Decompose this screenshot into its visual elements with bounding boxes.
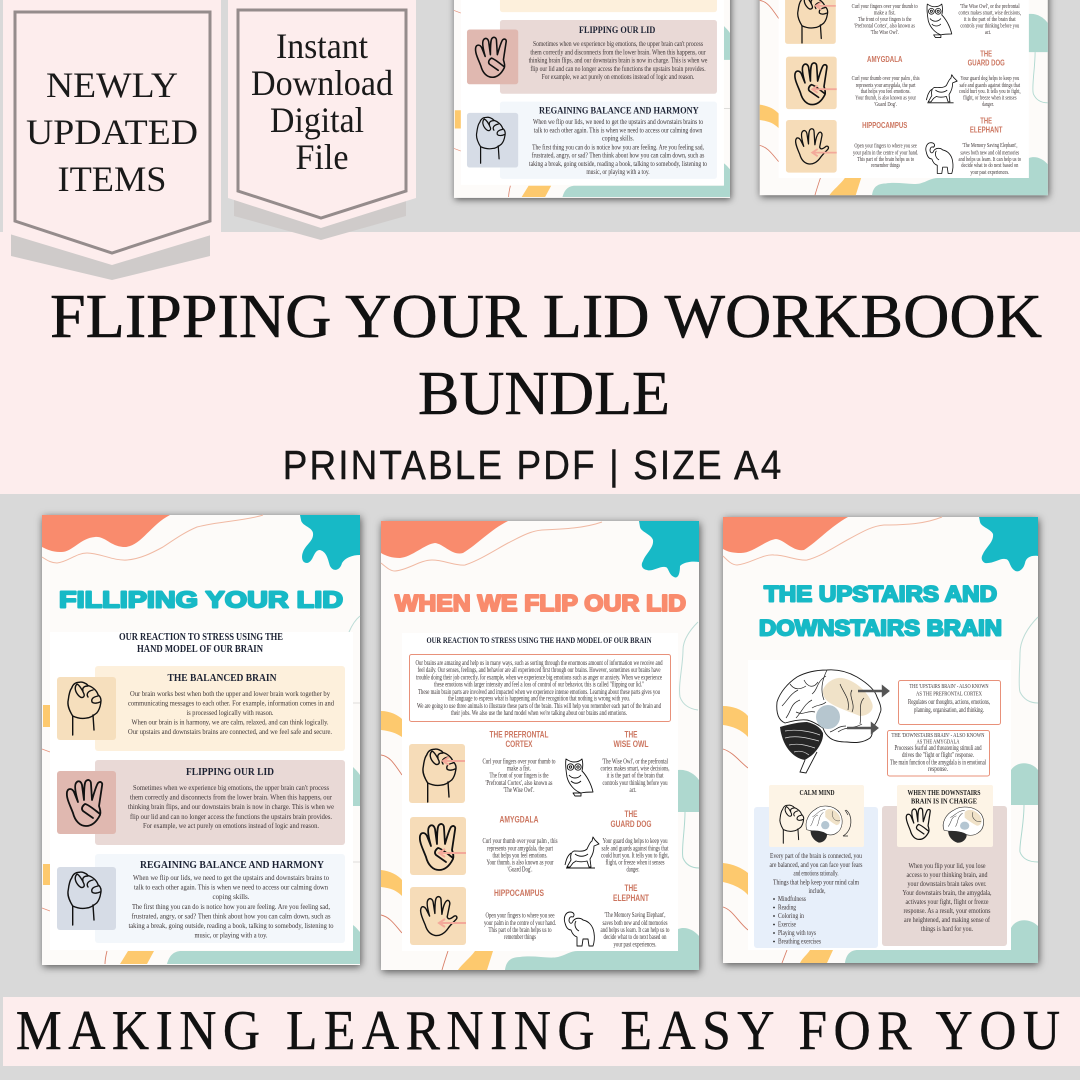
callout: downstairs brain: drives the "fight or flight" response.: [902, 752, 974, 759]
row: hippocampus and elephant: This part of the brain helps us to: [488, 927, 552, 934]
block: regaining balance and harmony: frustrated, angry, or sad? Then think about how you can calm down, such as: [132, 912, 330, 921]
row: amygdala and guard dog: THE: [624, 809, 638, 819]
card: when the downstairs brain is in charge: BRAIN IS IN CHARGE: [911, 798, 977, 806]
banner: instant download digital file: [228, 0, 416, 240]
row: hippocampus and elephant: 'The Memory Saving Elephant',: [604, 912, 666, 919]
top preview page: hand model: could hurt you. It tells you to fight,: [959, 88, 1021, 95]
banner band: pink title strip: [0, 232, 1080, 494]
banner: newly updated items: NEWLY: [46, 65, 178, 105]
block: regaining balance and harmony: [57, 854, 345, 943]
row: hippocampus and elephant: HIPPOCAMPUS: [494, 888, 544, 898]
heading: the upstairs and downstairs brain: THE UPSTAIRS AND: [764, 582, 997, 606]
top preview page: flipping our lid: REGAINING BALANCE AND HARMONY: [539, 106, 699, 116]
top preview page: hand model: THE: [980, 50, 992, 59]
title: [50, 283, 1042, 428]
panel: worksheet when we flip our lid: [381, 521, 699, 970]
block: the balanced brain: is processed logically with reason.: [186, 708, 274, 717]
callout: downstairs brain: THE 'DOWNSTAIRS BRAIN' - ALSO KNOWN: [892, 733, 985, 739]
top preview page: hand model: safe and guards against things that: [959, 82, 1020, 89]
row: amygdala and guard dog: [410, 809, 669, 875]
row: prefrontal cortex and wise owl: act.: [630, 787, 637, 794]
heading: the upstairs and downstairs brain: DOWNSTAIRS BRAIN: [759, 616, 1002, 640]
block: regaining balance and harmony: When we flip our lids, we need to get the upstairs and downstairs brains to: [133, 873, 329, 882]
subheading: OUR REACTION TO STRESS USING THE HAND MODEL OF OUR BRAIN: [426, 636, 652, 645]
top preview page: hand model: The front of your fingers is the: [858, 16, 912, 23]
card: when the downstairs brain is in charge: WHEN THE DOWNSTAIRS: [908, 790, 981, 797]
row: prefrontal cortex and wise owl: cortex makes smart, wise decisions,: [600, 766, 670, 772]
top preview page: hand model: danger.: [982, 102, 994, 108]
intro box: These main brain parts are involved and impacted when we experience intense emotions. Learning about these parts gives you: [418, 689, 660, 696]
row: hippocampus and elephant: THE: [624, 883, 638, 893]
row: amygdala and guard dog: Curl your thumb over your palm , this: [482, 838, 558, 845]
callout: upstairs brain: planning, organisation, and thinking.: [914, 707, 984, 714]
top preview page: hand model: cortex makes smart, wise decisions,: [959, 10, 1021, 16]
row: amygdala and guard dog: Your thumb, is also known as your: [486, 859, 554, 866]
row: amygdala and guard dog: flight, or freeze when it senses: [606, 859, 665, 866]
top preview page: hand model: act.: [985, 30, 992, 36]
top preview page: flipping our lid: thinking brain flips, and our downstairs brain is now in charge. This is when we: [529, 58, 707, 65]
card: when the downstairs brain is in charge: are heightened, and making sense of: [904, 915, 990, 924]
card: when the downstairs brain is in charge: Your downstairs brain, the amygdala,: [902, 888, 992, 897]
top preview page: hand model: Open your fingers to where you see: [854, 143, 917, 150]
row: hippocampus and elephant: your palm in the centre of your hand.: [484, 920, 556, 927]
top preview page: flipping our lid: coping skills.: [602, 136, 634, 143]
row: hippocampus and elephant: decide what to do next based on: [604, 934, 667, 941]
row: prefrontal cortex and wise owl: 'The Wise Owl', or the prefrontal: [602, 758, 668, 766]
row: amygdala and guard dog: AMYGDALA: [500, 815, 539, 825]
intro box: the language to express what is happening and the recognition that nothing is wrong with you.: [448, 696, 630, 702]
row: hippocampus and elephant: and helps us learn. It can help us to: [600, 927, 670, 934]
card: when the downstairs brain is in charge: things is hard for you.: [921, 924, 973, 933]
card: calm mind: include,: [808, 886, 826, 895]
top preview page: flipping our lid: them correctly and disconnects from the lower brain. When this happens, our: [530, 49, 706, 56]
top preview page: hand model: Your guard dog helps to keep you: [960, 76, 1019, 82]
card: calm mind: Things that help keep your mind calm: [773, 878, 859, 886]
intro box: these emotions with larger intensity and feel a loss of control of our behavior, this is called "flipping our lid.": [434, 682, 644, 688]
row: amygdala and guard dog: could hurt you. It tells you to fight,: [601, 852, 669, 859]
top preview page: hand model: Curl your thumb over your palm , this: [852, 76, 920, 82]
row: hippocampus and elephant: your past experiences.: [614, 942, 657, 949]
intro box: feel daily. Our senses, feelings, and behavior are all experienced first through our brains. However, sometimes our brains have: [418, 667, 660, 674]
block: the balanced brain: Our brain works best when both the upper and lower brain work together by: [130, 689, 330, 698]
block: flipping our lid: them correctly and disconnects from the lower brain. When this happens, our: [130, 793, 332, 802]
card: calm mind: Exercise: [778, 920, 796, 928]
top preview page: hand model: 'Guard Dog'.: [874, 102, 897, 108]
top preview page: hand model: remember things: [871, 163, 901, 169]
top preview page: hand model: decide what to do next based on: [961, 163, 1018, 169]
row: amygdala and guard dog: GUARD DOG: [610, 819, 652, 829]
row: amygdala and guard dog: Your guard dog helps to keep you: [602, 838, 668, 845]
intro box: [410, 654, 670, 722]
title: FLIPPING YOUR LID WORKBOOK: [50, 283, 1042, 351]
block: the balanced brain: [57, 666, 345, 751]
callout: upstairs brain: AS THE PREFRONTAL CORTEX: [916, 692, 983, 698]
subtitle: PRINTABLE PDF | SIZE A4: [283, 443, 781, 488]
row: prefrontal cortex and wise owl: Curl your fingers over your thumb to: [482, 758, 556, 766]
callout: upstairs brain: Regulates our thoughts, actions, emotions,: [908, 699, 990, 706]
banner: newly updated items: [3, 0, 221, 280]
row: hippocampus and elephant: remember things: [504, 934, 536, 941]
brain diagram: [777, 670, 881, 773]
panel: worksheet upstairs and downstairs brain: [723, 517, 1038, 963]
row: prefrontal cortex and wise owl: 'Prefrontal Cortex', also known as: [486, 780, 553, 787]
card: calm mind: Coloring in: [778, 911, 804, 920]
top preview page: hand model: THE: [980, 117, 992, 126]
arrow: to downstairs brain: [847, 724, 877, 732]
top preview page: flipping our lid: taking a break, going outside, reading a book, talking to somebody, listening to: [529, 161, 707, 168]
card: calm mind: Mindfulness: [778, 894, 806, 903]
row: hippocampus and elephant: Open your fingers to where you see: [486, 913, 554, 920]
card: calm mind: Breathing exercises: [778, 936, 821, 946]
card: when the downstairs brain is in charge: response. As a result, your emotions: [904, 906, 990, 915]
card: calm mind: Playing with toys: [778, 928, 816, 937]
top preview page: hand model: [760, 0, 1048, 195]
block: the balanced brain: When our brain is in harmony, we are calm, relaxed, and can think logically.: [132, 718, 329, 727]
top preview page: hand model: 'Prefrontal Cortex', also known as: [854, 23, 916, 30]
row: amygdala and guard dog: safe and guards against things that: [602, 845, 669, 852]
top preview page: hand model: AMYGDALA: [867, 55, 902, 64]
top preview page: flipping our lid: music, or playing with a toy.: [586, 169, 650, 176]
card: calm mind: are balanced, and you can face your fears: [770, 860, 862, 869]
block: flipping our lid: [57, 760, 345, 845]
top preview page: hand model: controls your thinking before you: [960, 23, 1019, 30]
top preview page: flipping our lid: The first thing you can do is notice how you are feeling. Are you feeling sad,: [532, 144, 704, 151]
top preview page: hand model: saves both new and old memories: [960, 150, 1020, 156]
callout: downstairs brain: [888, 730, 990, 776]
row: prefrontal cortex and wise owl: The front of your fingers is the: [490, 772, 548, 780]
arrow: to upstairs brain: [858, 687, 888, 695]
top preview page: hand model: 'The Wise Owl'.: [871, 30, 899, 36]
block: flipping our lid: thinking brain flips, and our downstairs brain is now in charge. This is when we: [128, 802, 334, 811]
row: prefrontal cortex and wise owl: THE: [624, 730, 638, 740]
card: when the downstairs brain is in charge: your downstairs brain takes over.: [908, 879, 987, 888]
row: hippocampus and elephant: saves both new and old memories: [602, 920, 668, 927]
card: calm mind: and emotions rationally.: [794, 868, 839, 878]
block: flipping our lid: Sometimes when we experience big emotions, the upper brain can't process: [133, 783, 329, 792]
block: the balanced brain: communicating messages to each other. For example, information comes in and: [128, 698, 334, 708]
block: regaining balance and harmony: coping skills.: [212, 892, 250, 901]
banner: instant download digital file: Instant: [276, 26, 368, 66]
banner: newly updated items: ITEMS: [58, 159, 166, 199]
title: BUNDLE: [418, 360, 670, 428]
block: regaining balance and harmony: music, or playing with a toy.: [194, 930, 268, 940]
block: regaining balance and harmony: talk to each other again. This is when we need to access our calming down: [134, 883, 328, 892]
banner: instant download digital file: Digital: [270, 100, 364, 140]
block: flipping our lid: For example, we act purely on emotions instead of logic and reason.: [143, 821, 319, 830]
top preview page: flipping our lid: Sometimes when we experience big emotions, the upper brain can't process: [533, 41, 703, 48]
banner: instant download digital file: Download: [251, 63, 393, 103]
callout: downstairs brain: AS THE AMYGDALA: [916, 740, 960, 746]
card: calm mind: CALM MIND: [800, 790, 835, 797]
row: amygdala and guard dog: danger.: [626, 867, 640, 874]
top preview page: hand model: and helps us learn. It can help us to: [959, 157, 1021, 163]
subheading: [119, 632, 283, 655]
footer band with tagline: MAKING LEARNING EASY FOR YOU: [16, 999, 1060, 1061]
subheading: HAND MODEL OF OUR BRAIN: [137, 644, 263, 655]
row: prefrontal cortex and wise owl: WISE OWL: [614, 739, 649, 749]
heading: the upstairs and downstairs brain: [759, 582, 1002, 640]
top preview page: flipping our lid: [454, 0, 730, 198]
callout: upstairs brain: THE 'UPSTAIRS BRAIN' - ALSO KNOWN: [910, 684, 989, 690]
top preview page: flipping our lid: flip our lid and can no longer access the functions the upstairs brain provides.: [530, 66, 706, 73]
block: regaining balance and harmony: The first thing you can do is notice how you are feeling. Are you feeling sad,: [132, 902, 330, 911]
row: hippocampus and elephant: [410, 883, 670, 949]
row: prefrontal cortex and wise owl: controls your thinking before you: [602, 780, 668, 787]
callout: downstairs brain: response.: [928, 766, 948, 773]
panel: worksheet filliping your lid: [42, 515, 360, 965]
heading: when we flip our lid: WHEN WE FLIP OUR LID: [395, 590, 686, 616]
top preview page: hand model: HIPPOCAMPUS: [862, 121, 908, 130]
top preview page: hand model: that helps you feel emotions.: [861, 88, 911, 95]
card: when the downstairs brain is in charge: [882, 785, 1007, 946]
block: the balanced brain: Our upstairs and downstairs brains are connected, and we feel safe and secure.: [128, 727, 332, 736]
top preview page: hand model: it is the part of the brain that: [964, 16, 1016, 23]
top preview page: hand model: represents your amygdala, the part: [856, 83, 916, 89]
top preview page: hand model: your palm in the centre of your hand.: [853, 149, 919, 156]
card: calm mind: Every part of the brain is connected, you: [770, 851, 862, 860]
row: prefrontal cortex and wise owl: [409, 730, 670, 803]
decor shapes: [723, 517, 1038, 963]
callout: downstairs brain: Processes fearful and threatening stimuli and: [894, 745, 982, 752]
top preview page: flipping our lid: For example, we act purely on emotions instead of logic and reason.: [542, 74, 695, 81]
block: regaining balance and harmony: REGAINING BALANCE AND HARMONY: [140, 860, 324, 871]
intro box: their jobs. We also use the hand model when we're talking about our brains and emotions.: [451, 710, 627, 717]
card: calm mind: [754, 785, 878, 948]
card: when the downstairs brain is in charge: When you flip your lid, you lose: [908, 861, 986, 870]
top preview page: hand model: GUARD DOG: [968, 59, 1005, 68]
row: prefrontal cortex and wise owl: CORTEX: [506, 739, 532, 749]
row: amygdala and guard dog: that helps you feel emotions.: [492, 852, 548, 859]
top preview page: hand model: 'The Wise Owl', or the prefrontal: [960, 3, 1020, 10]
row: prefrontal cortex and wise owl: THE PREFRONTAL: [490, 730, 549, 740]
callout: downstairs brain: The main function of the amygdala is in emotional: [890, 760, 986, 766]
row: prefrontal cortex and wise owl: make a fist.: [507, 766, 531, 772]
block: regaining balance and harmony: taking a break, going outside, reading a book, talking to somebody, listening to: [128, 921, 334, 930]
subheading: OUR REACTION TO STRESS USING THE: [119, 632, 283, 643]
row: prefrontal cortex and wise owl: it is the part of the brain that: [606, 772, 664, 780]
row: amygdala and guard dog: represents your amygdala, the part: [487, 845, 553, 852]
top preview page: hand model: your past experiences.: [970, 170, 1010, 176]
card: when the downstairs brain is in charge: activates your fight, flight or freeze: [906, 897, 989, 906]
top preview page: flipping our lid: frustrated, angry, or sad? Then think about how you can calm down, such as: [532, 153, 705, 160]
top preview page: hand model: Your thumb, is also known as your: [855, 95, 916, 101]
intro box: Our brains are amazing and help us in many ways, such as sorting through the enormous amount of information we receive and: [416, 660, 663, 667]
card: calm mind: Reading: [778, 902, 796, 912]
top preview page: hand model: Curl your fingers over your thumb to: [852, 3, 918, 10]
row: prefrontal cortex and wise owl: 'The Wise Owl'.: [504, 787, 535, 794]
top preview page: flipping our lid: FLIPPING OUR LID: [579, 25, 656, 35]
block: flipping our lid: FLIPPING OUR LID: [186, 767, 274, 778]
top preview page: hand model: ELEPHANT: [970, 126, 1003, 135]
block: flipping our lid: flip our lid and can no longer access the functions the upstairs brain provides.: [130, 812, 332, 821]
top preview page: hand model: flight, or freeze when it senses: [963, 94, 1017, 101]
top preview page: flipping our lid: When we flip our lids, we need to get the upstairs and downstairs brains to: [533, 119, 704, 126]
top preview page: hand model: make a fist.: [874, 9, 896, 16]
heading: filliping your lid: FILLIPING YOUR LID: [59, 586, 343, 612]
banner: instant download digital file: File: [296, 137, 348, 177]
row: amygdala and guard dog: 'Guard Dog'.: [508, 867, 533, 874]
callout: upstairs brain: [898, 680, 1000, 724]
top preview page: hand model: 'The Memory Saving Elephant',: [962, 143, 1018, 149]
top preview page: flipping our lid: talk to each other again. This is when we need to access our calming down: [534, 128, 703, 135]
row: hippocampus and elephant: ELEPHANT: [613, 893, 649, 903]
intro box: We are going to use three animals to illustrate these parts of the brain. This will help you remember each part of the brain and: [417, 703, 661, 710]
intro box: trouble doing their job correctly, for example, when we experience big emotions such as anger or anxiety. When we experience: [416, 674, 662, 682]
top preview page: hand model: This part of the brain helps us to: [857, 156, 914, 163]
banner: newly updated items: UPDATED: [26, 112, 198, 152]
card: when the downstairs brain is in charge: access to your thinking brain, and: [906, 870, 988, 879]
block: the balanced brain: THE BALANCED BRAIN: [168, 673, 277, 684]
